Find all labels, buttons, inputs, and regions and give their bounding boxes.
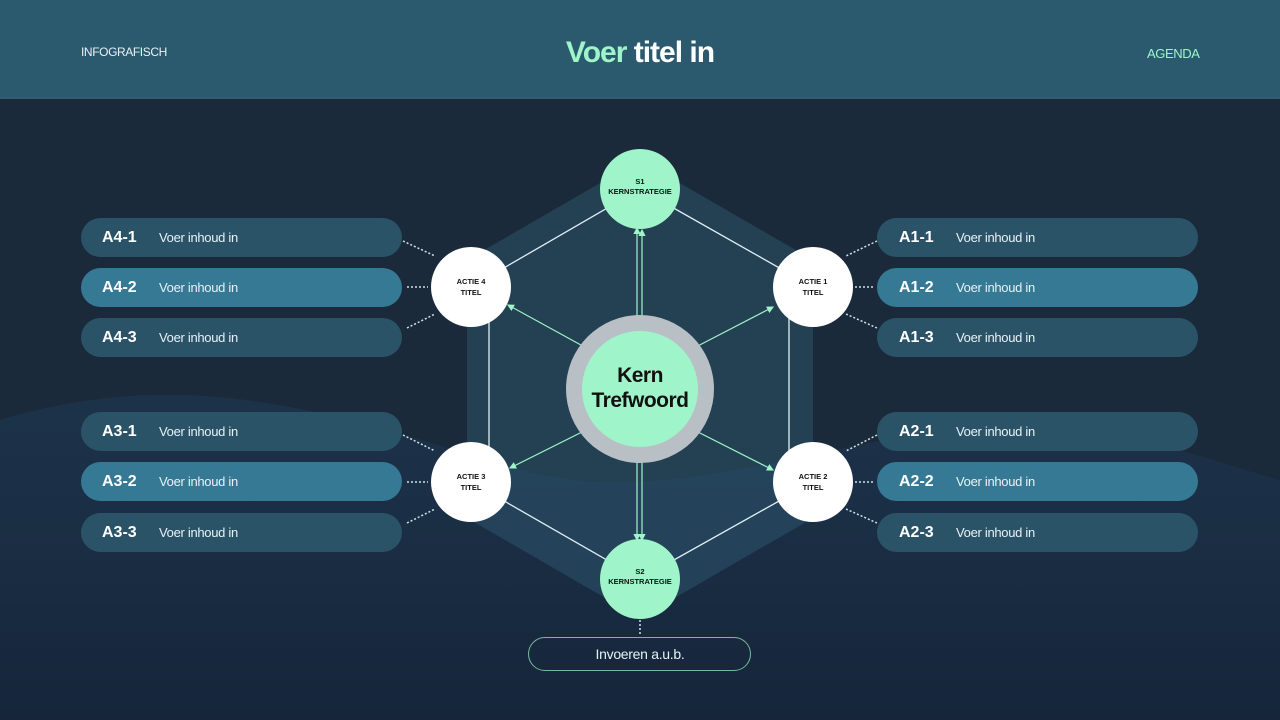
- right pills group A2: [877, 412, 1198, 552]
- actie 1 circle: TITEL: [803, 288, 824, 297]
- pill A3-2: Voer inhoud in: [159, 474, 238, 489]
- pill A2-2: [877, 462, 1198, 501]
- left pills group A3: [81, 412, 402, 552]
- S1 circle: [600, 149, 680, 229]
- pill A4-1: Voer inhoud in: [159, 230, 238, 245]
- actie 2 circle: TITEL: [803, 483, 824, 492]
- actie 4 circle: [431, 247, 511, 327]
- pill A2-3: [877, 513, 1198, 552]
- pill A4-1: [81, 218, 402, 257]
- pill A3-1: [81, 412, 402, 451]
- pill A4-2: [81, 268, 402, 307]
- title: Voer titel in: [566, 36, 714, 69]
- pill A2-1: Voer inhoud in: [956, 424, 1035, 439]
- right pills group A1: [877, 218, 1198, 357]
- pill A2-3: Voer inhoud in: [956, 525, 1035, 540]
- S2 circle: S2: [635, 567, 645, 576]
- S1 circle: KERNSTRATEGIE: [608, 187, 672, 196]
- pill A3-3: [81, 513, 402, 552]
- pill A2-1: A2-1: [899, 423, 934, 440]
- pill A2-1: [877, 412, 1198, 451]
- actie 4 circle: TITEL: [461, 288, 482, 297]
- pill A4-2: A4-2: [102, 279, 137, 296]
- actie 3 circle: TITEL: [461, 483, 482, 492]
- actie 2 circle: ACTIE 2: [799, 472, 827, 481]
- center keyword circle: Trefwoord: [591, 389, 689, 412]
- S1 circle: S1: [635, 177, 645, 186]
- pill A3-1: A3-1: [102, 423, 137, 440]
- pill A3-2: [81, 462, 402, 501]
- pill A3-1: Voer inhoud in: [159, 424, 238, 439]
- pill A1-3: A1-3: [899, 329, 934, 346]
- pill A1-2: A1-2: [899, 279, 934, 296]
- pill A1-1: [877, 218, 1198, 257]
- pill A3-3: A3-3: [102, 524, 137, 541]
- pill A1-1: A1-1: [899, 229, 934, 246]
- pill A4-1: A4-1: [102, 229, 137, 246]
- pill A3-2: A3-2: [102, 473, 137, 490]
- bottom input box: [528, 638, 750, 670]
- actie 4 circle: ACTIE 4: [457, 277, 486, 286]
- S2 circle: [600, 539, 680, 619]
- pill A1-3: Voer inhoud in: [956, 330, 1035, 345]
- header right label: AGENDA: [1147, 46, 1200, 61]
- pill A2-2: Voer inhoud in: [956, 474, 1035, 489]
- left pills group A4: [81, 218, 402, 357]
- actie 1 circle: ACTIE 1: [799, 277, 827, 286]
- pill A4-3: [81, 318, 402, 357]
- pill A2-3: A2-3: [899, 524, 934, 541]
- pill A1-2: Voer inhoud in: [956, 280, 1035, 295]
- pill A1-2: [877, 268, 1198, 307]
- header left label: INFOGRAFISCH: [81, 45, 167, 59]
- pill A3-3: Voer inhoud in: [159, 525, 238, 540]
- actie 1 circle: [773, 247, 853, 327]
- pill A1-3: [877, 318, 1198, 357]
- actie 3 circle: ACTIE 3: [457, 472, 485, 481]
- actie 3 circle: [431, 442, 511, 522]
- bottom input box: Invoeren a.u.b.: [596, 646, 684, 662]
- center keyword circle: Kern: [617, 364, 663, 387]
- pill A1-1: Voer inhoud in: [956, 230, 1035, 245]
- pill A4-2: Voer inhoud in: [159, 280, 238, 295]
- S2 circle: KERNSTRATEGIE: [608, 577, 672, 586]
- header bar: [0, 0, 1280, 99]
- pill A2-2: A2-2: [899, 473, 934, 490]
- pill A4-3: Voer inhoud in: [159, 330, 238, 345]
- center keyword circle: [566, 315, 714, 463]
- pill A4-3: A4-3: [102, 329, 137, 346]
- actie 2 circle: [773, 442, 853, 522]
